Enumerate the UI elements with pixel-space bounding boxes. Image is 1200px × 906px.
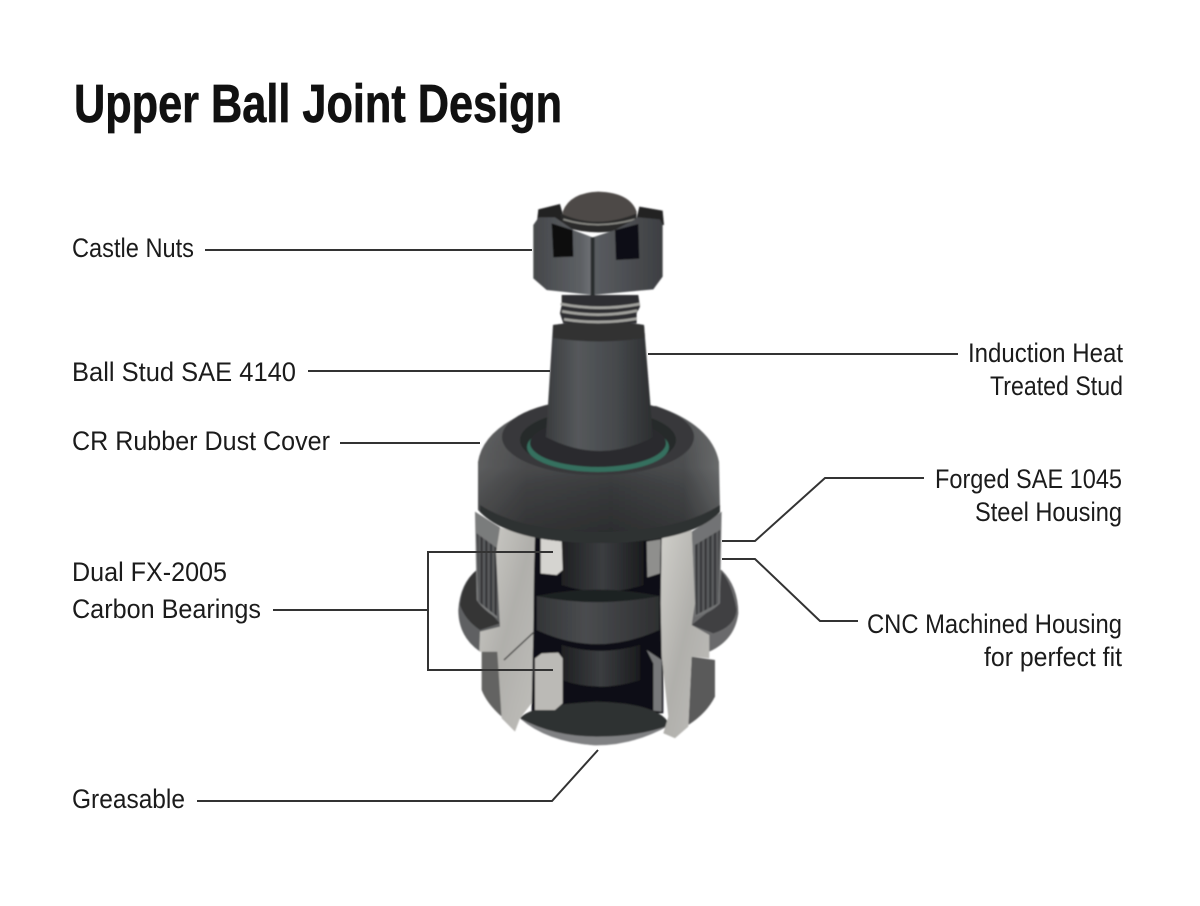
label: carbon bearings: Dual FX-2005: [72, 557, 227, 587]
middle bearing ring: [537, 590, 659, 644]
title: Upper Ball Joint Design: [74, 74, 562, 134]
label: carbon bearings: Carbon Bearings: [72, 594, 261, 624]
leader: castle nuts: [205, 249, 532, 251]
label: forged housing: Steel Housing: [975, 497, 1122, 527]
label: induction heat treated stud: Induction Heat: [968, 338, 1123, 368]
leader: ball stud: [308, 370, 550, 372]
label: CNC housing: for perfect fit: [984, 642, 1122, 672]
inner cavity: [532, 537, 663, 713]
castle nut: [533, 192, 664, 295]
label: forged housing: [935, 464, 1122, 527]
label: CNC housing: [867, 609, 1122, 672]
ball stud: [546, 322, 653, 451]
knurled housing band: [475, 512, 502, 618]
leader: forged housing: [722, 478, 924, 541]
label: induction heat treated stud: [968, 338, 1123, 401]
label: forged housing: Forged SAE 1045: [935, 464, 1122, 494]
dust cover: [478, 406, 720, 543]
lower flange: [458, 570, 500, 652]
leader: carbon bearings bracket: [273, 552, 553, 670]
thread: [560, 295, 640, 323]
rear crown: [537, 204, 664, 225]
label: induction heat treated stud: Treated Stud: [990, 371, 1123, 401]
label: carbon bearings: [72, 557, 261, 624]
left cut face: [479, 527, 535, 732]
leader: CNC housing: [722, 559, 858, 621]
lower core: [562, 645, 640, 687]
label: greasable: Greasable: [72, 784, 185, 814]
leader: dust cover: [340, 442, 480, 444]
lower housing: [458, 512, 738, 745]
dome: [563, 192, 637, 232]
nut slots: [552, 223, 573, 257]
right cut face: [661, 530, 709, 738]
label: ball stud: Ball Stud SAE 4140: [72, 357, 296, 387]
skirt below flange: [482, 652, 502, 717]
leader: induction heat treated stud: [648, 353, 958, 355]
leader: greasable: [197, 750, 598, 801]
label: castle nuts: Castle Nuts: [72, 233, 194, 263]
nut faces: [533, 217, 593, 295]
lower bearings: [535, 653, 563, 710]
label: CNC housing: CNC Machined Housing: [867, 609, 1122, 639]
base plate: [520, 702, 670, 745]
upper core: [562, 542, 643, 592]
upper bearings: [541, 538, 563, 575]
crack line on cut face: [504, 633, 533, 660]
label: dust cover: CR Rubber Dust Cover: [72, 426, 330, 456]
photo: ball joint: [458, 192, 738, 745]
